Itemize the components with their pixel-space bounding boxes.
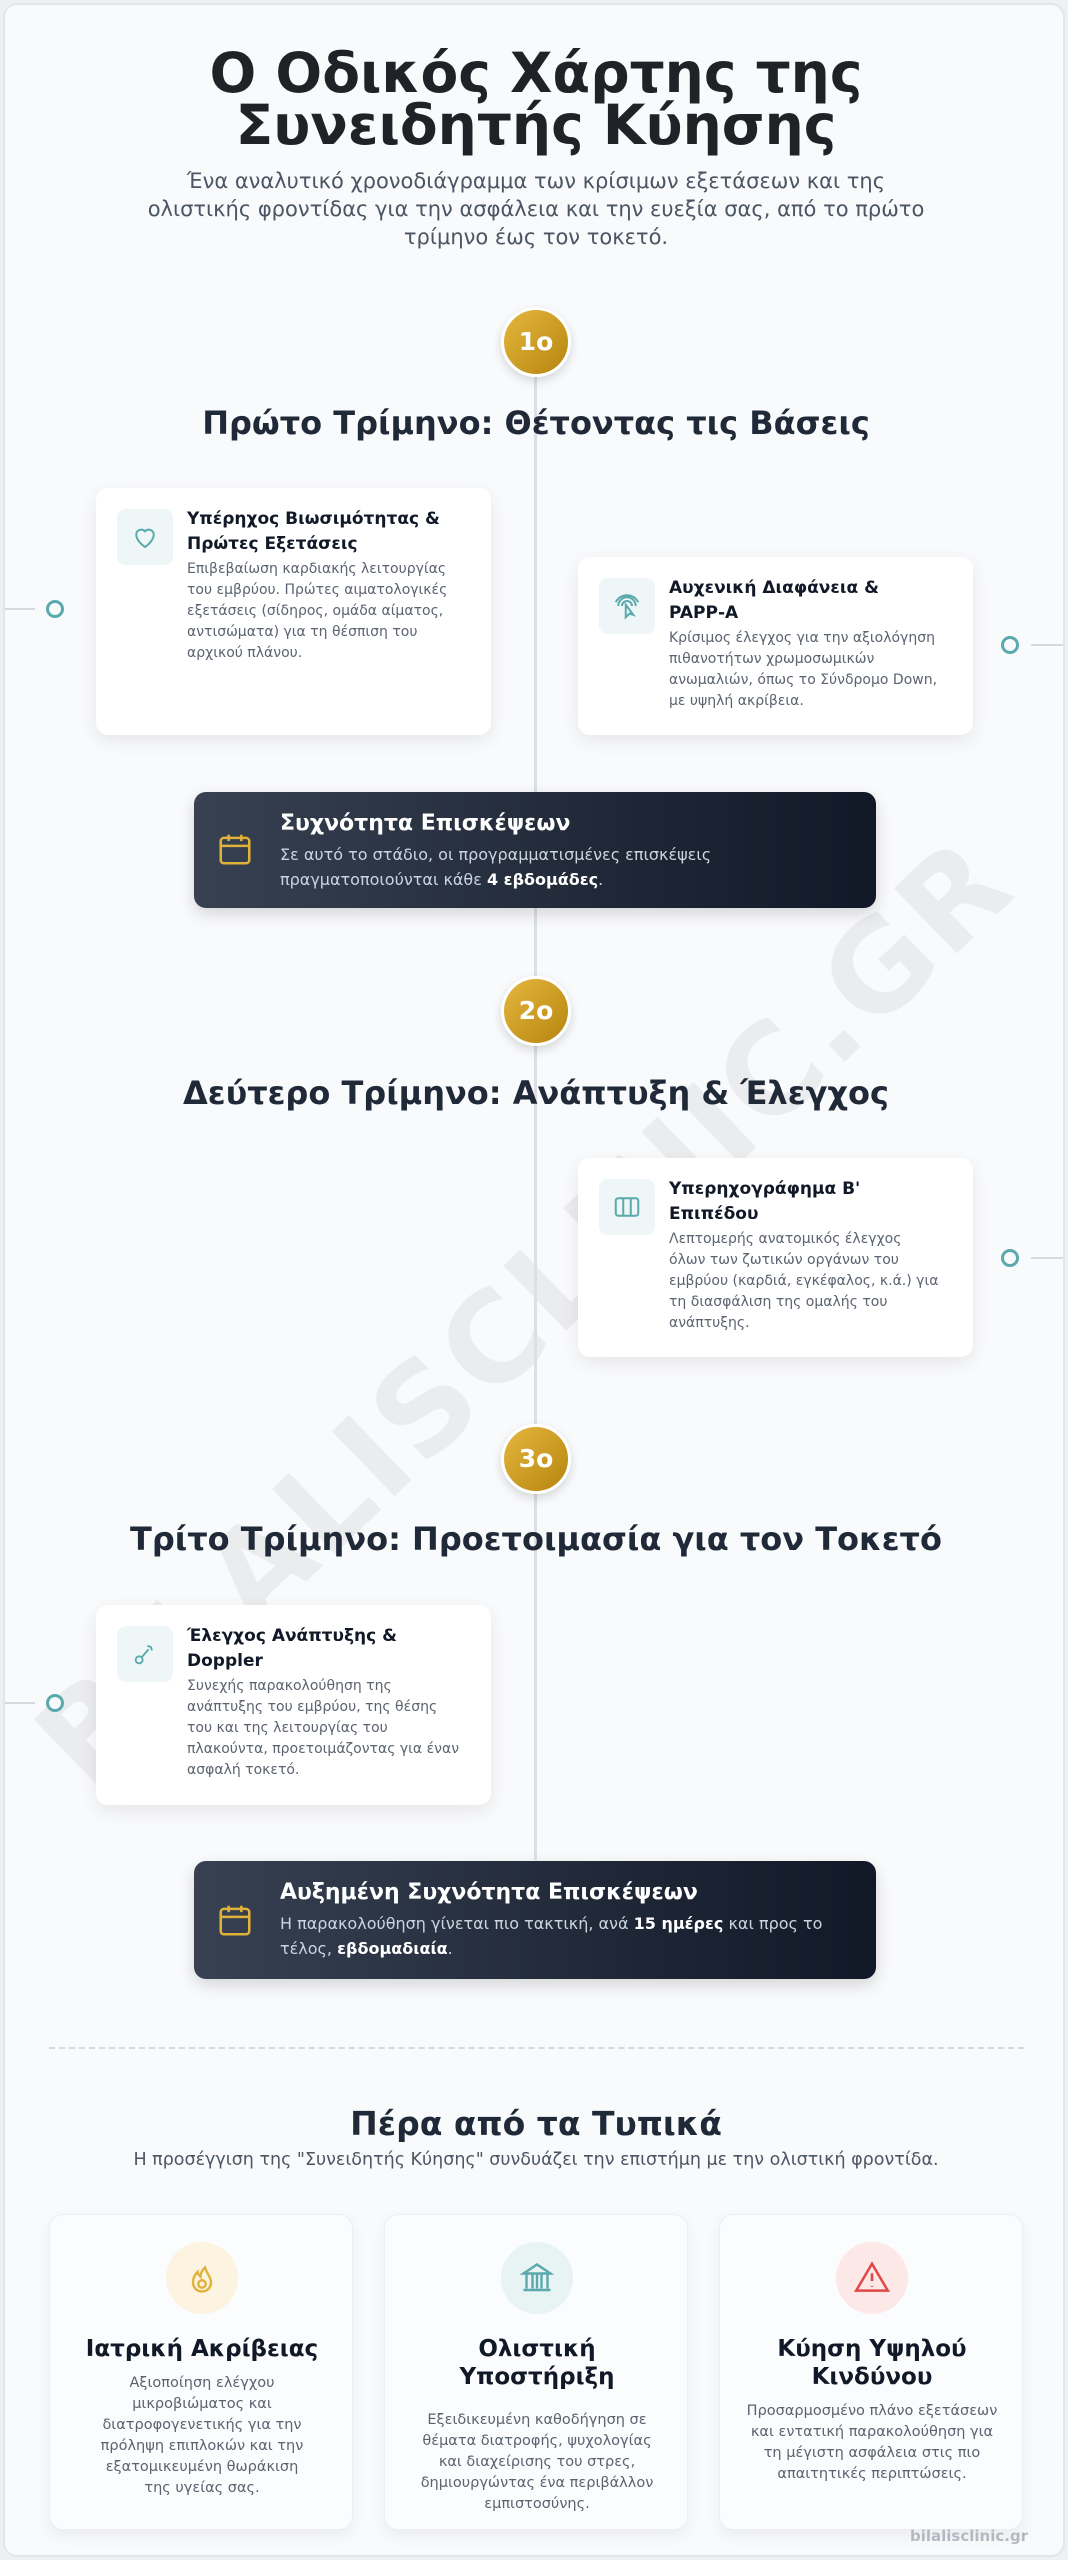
subtitle: Ένα αναλυτικό χρονοδιάγραμμα των κρίσιμων εξετάσεων και της — [187, 169, 885, 193]
card: nuchal translucency: PAPP‑A — [669, 603, 738, 623]
subtitle: ολιστικής φροντίδας για την ασφάλεια και την ευεξία σας, από το πρώτο — [148, 197, 924, 221]
card: medical precision: Αξιοποίηση ελέγχου μικροβιώματος και διατροφογενετικής για την πρόληψη επιπλοκών και την εξατομικευμένη θωράκιση της υγείας σας. — [101, 2375, 303, 2496]
timeline line — [534, 345, 537, 1860]
badge 3 — [501, 1424, 571, 1494]
subtitle: τρίμηνο έως τον τοκετό. — [404, 225, 668, 249]
card: holistic support — [384, 2214, 688, 2530]
heading 1: Πρώτο Τρίμηνο: Θέτοντας τις Βάσεις — [202, 404, 870, 442]
card: heartbeat ultrasound — [96, 488, 491, 735]
connector dot right 2 — [1001, 1249, 1063, 1267]
callout: increased visits: Η παρακολούθηση γίνεται πιο τακτική, ανά 15 ημέρες και προς το τέλος, εβδομαδιαία. — [280, 1914, 822, 1958]
card: nuchal translucency — [578, 557, 973, 735]
icon: warning — [836, 2242, 908, 2314]
card: growth & doppler — [96, 1605, 491, 1805]
icon: landmark — [501, 2242, 573, 2314]
card: high risk pregnancy: Κύηση Υψηλού Κινδύνου — [777, 2336, 967, 2390]
icon: heart — [117, 509, 173, 565]
badge 2: 2ο — [519, 996, 553, 1025]
card: level 2 ultrasound — [578, 1158, 973, 1357]
connector dot right 1 — [1001, 636, 1063, 654]
icon: dna — [117, 1626, 173, 1682]
card: high risk pregnancy — [719, 2214, 1023, 2530]
icon: calendar — [220, 1906, 250, 1936]
callout: visit frequency — [194, 792, 876, 908]
badge 3: 3ο — [519, 1444, 553, 1473]
card: growth & doppler: Συνεχής παρακολούθηση της — [187, 1678, 392, 1694]
connector dot left 1 — [5, 600, 64, 618]
card: high risk pregnancy: Προσαρμοσμένο πλάνο εξετάσεων και εντατική παρακολούθηση για τη μέγιστη ασφάλεια στις πιο απαιτητικές περιπτώσεις. — [747, 2403, 997, 2482]
card: growth & doppler: ανάπτυξης του εμβρύου, της θέσης — [187, 1699, 437, 1715]
card: holistic support: Εξειδικευμένη καθοδήγηση σε θέματα διατροφής, ψυχολογίας και διαχείρισης του στρες, δημιουργώντας ένα περιβάλλον εμπιστοσύνης. — [421, 2412, 653, 2512]
badge 1: 1ο — [519, 327, 553, 356]
watermark: BILALISCLINIC.GR — [9, 810, 1041, 1814]
section subtitle: Η προσέγγιση της "Συνειδητής Κύησης" συνδυάζει την επιστήμη με την ολιστική φροντίδα. — [133, 2150, 939, 2170]
card: growth & doppler: του και της λειτουργίας του — [187, 1720, 388, 1736]
card: growth & doppler: πλακούντα, προετοιμάζοντας για έναν — [187, 1741, 459, 1757]
title — [210, 41, 862, 157]
badge 1 — [501, 307, 571, 377]
card: growth & doppler: Έλεγχος Ανάπτυξης & Doppler — [187, 1626, 397, 1671]
heading: beyond the standard: Πέρα από τα Τυπικά — [350, 2104, 722, 2143]
connector dot left 3 — [5, 1694, 64, 1712]
card: holistic support: Ολιστική Υποστήριξη — [459, 2336, 614, 2390]
footer brand: bilalisclinic.gr — [910, 2527, 1028, 2545]
title: Ο Οδικός Χάρτης της — [210, 41, 862, 105]
icon: fingerprint — [599, 578, 655, 634]
icon: calendar — [220, 834, 250, 864]
subtitle — [148, 169, 924, 249]
heading 2: Δεύτερο Τρίμηνο: Ανάπτυξη & Έλεγχος — [183, 1074, 889, 1112]
heading 3: Τρίτο Τρίμηνο: Προετοιμασία για τον Τοκετό — [130, 1520, 942, 1558]
icon: columns — [599, 1179, 655, 1235]
card: nuchal translucency: Αυχενική Διαφάνεια & — [669, 578, 879, 598]
badge 2 — [501, 976, 571, 1046]
callout: increased visits — [194, 1861, 876, 1979]
card: growth & doppler: ασφαλή τοκετό. — [187, 1762, 299, 1778]
callout: visit frequency: Σε αυτό το στάδιο, οι προγραμματισμένες επισκέψεις πραγματοποιούνται κάθε 4 εβδομάδες. — [280, 845, 711, 889]
card: level 2 ultrasound: Λεπτομερής ανατομικός έλεγχος όλων των ζωτικών οργάνων του εμβρύου (καρδιά, εγκέφαλος, κ.ά.) για τη διασφάλιση της ομαλής του ανάπτυξης. — [669, 1231, 938, 1331]
card: heartbeat ultrasound: Υπέρηχος Βιωσιμότητας & Πρώτες Εξετάσεις — [187, 509, 440, 554]
card: medical precision: Ιατρική Ακρίβειας — [86, 2336, 318, 2362]
card: medical precision — [49, 2214, 353, 2530]
card: heartbeat ultrasound: Επιβεβαίωση καρδιακής λειτουργίας του εμβρύου. Πρώτες αιματολογικές εξετάσεις (σίδηρος, ομάδα αίματος, αντισώματα) για τη θέσπιση του αρχικού πλάνου. — [187, 561, 447, 661]
card: level 2 ultrasound: Υπερηχογράφημα Β' Επιπέδου — [669, 1179, 860, 1224]
card: nuchal translucency: Κρίσιμος έλεγχος για την αξιολόγηση πιθανοτήτων χρωμοσωμικών ανωμαλιών, όπως το Σύνδρομο Down, με υψηλή ακρίβεια. — [669, 630, 937, 709]
callout: visit frequency: Συχνότητα Επισκέψεων — [280, 811, 571, 836]
title: Συνειδητής Κύησης — [236, 93, 836, 157]
callout: increased visits: Αυξημένη Συχνότητα Επισκέψεων — [280, 1880, 698, 1905]
icon: flame — [166, 2242, 238, 2314]
